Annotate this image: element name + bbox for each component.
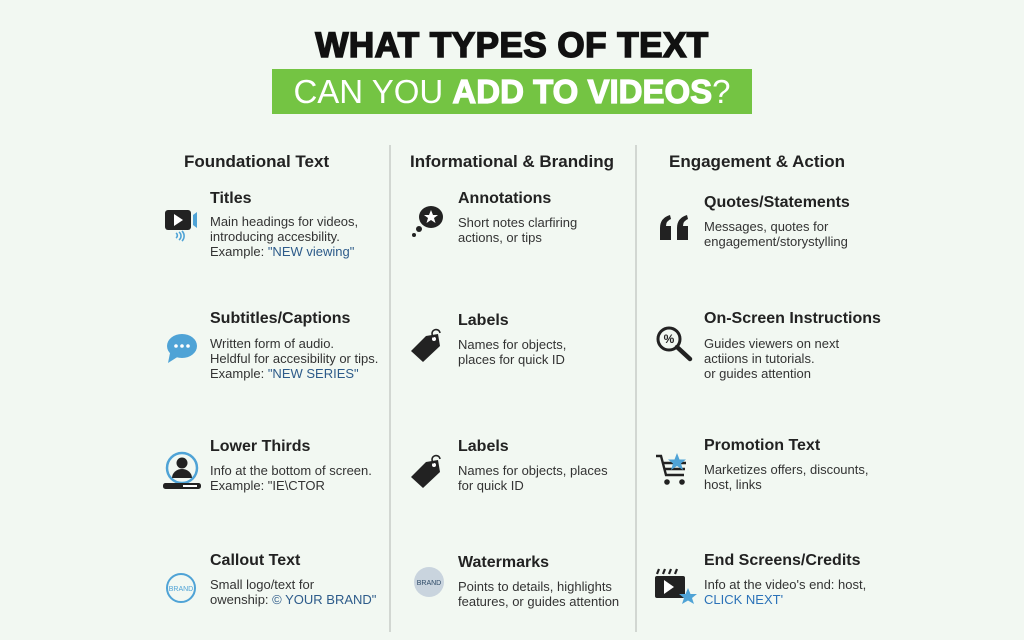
column heading: foundational: Foundational Text (184, 152, 329, 171)
item: Annotations (412, 190, 577, 245)
item: Lower thirds: Info at the bottom of screen. (210, 463, 372, 478)
item: On-screen: or guides attention (704, 366, 811, 381)
icon: cart star (656, 453, 686, 485)
item: Labels 1: Names for objects, (458, 337, 566, 352)
item: Subtitles: Written form of audio. (210, 336, 334, 351)
item: Labels 2: Labels (458, 438, 509, 455)
item: Callout: Small logo/text for (210, 577, 314, 592)
item: Watermarks: Watermarks (458, 554, 549, 571)
item: Labels 1: places for quick ID (458, 352, 565, 367)
item: Titles: Titles (210, 190, 252, 207)
item: Watermarks (414, 554, 619, 609)
item: Labels 1 (411, 312, 566, 367)
item: End screens (655, 552, 866, 607)
item: Promotion (656, 437, 868, 492)
item: Quotes: Quotes/Statements (704, 194, 850, 211)
item: Promotion: Promotion Text (704, 437, 820, 454)
item: Callout (166, 552, 376, 607)
item: Callout: owenship: © YOUR BRAND" (210, 592, 376, 607)
item: Promotion: Marketizes offers, discounts, (704, 462, 868, 477)
item: On-screen: actiions in tutorials. (704, 351, 815, 366)
icon: speech bubble (167, 334, 197, 363)
icon: magnifier percent: % (664, 332, 675, 346)
icon: clapper star (655, 568, 697, 604)
item: Annotations: Short notes clarfiring (458, 215, 577, 230)
item: Subtitles: Heldful for accesibility or tips. (210, 351, 378, 366)
title: WHAT TYPES OF TEXT (315, 26, 709, 65)
item: Labels 2: for quick ID (458, 478, 524, 493)
item: Titles: Main headings for videos, (210, 214, 358, 229)
item: Quotes: Messages, quotes for (704, 219, 828, 234)
item: On-screen: On-Screen Instructions (704, 310, 881, 327)
icon: magnifier percent (656, 326, 692, 362)
item: Labels 2 (411, 438, 608, 493)
icon: brand circle: BRAND (169, 586, 193, 593)
item: Watermarks: Points to details, highlights (458, 579, 612, 594)
column heading: engagement: Engagement & Action (669, 152, 845, 171)
item: Watermarks: features, or guides attention (458, 594, 619, 609)
icon: video play (165, 210, 197, 242)
item: Annotations: actions, or tips (458, 230, 542, 245)
item: Titles (165, 190, 358, 259)
item: Callout: Callout Text (210, 552, 300, 569)
item: Titles: introducing accesbility. (210, 229, 340, 244)
icon: quote (660, 215, 688, 240)
item: Subtitles: Subtitles/Captions (210, 310, 350, 327)
item: Lower thirds (163, 438, 372, 493)
item: Subtitles: Example: "NEW SERIES" (210, 366, 359, 381)
item: Annotations: Annotations (458, 190, 551, 207)
item: Subtitles (167, 310, 378, 381)
item: Lower thirds: Lower Thirds (210, 438, 310, 455)
item: Promotion: host, links (704, 477, 762, 492)
item: Labels 2: Names for objects, places (458, 463, 608, 478)
item: Lower thirds: Example: "IE\CTOR (210, 478, 325, 493)
icon: thought star (412, 206, 443, 237)
icon: person lower third (163, 452, 201, 489)
icon: brand watermark (414, 567, 444, 597)
icon: brand watermark: BRAND (417, 580, 441, 587)
item: End screens: Info at the video's end: host, (704, 577, 866, 592)
subtitle band: CAN YOU ADD TO VIDEOS? (293, 73, 731, 110)
item: End screens: End Screens/Credits (704, 552, 860, 569)
item: On-screen: Guides viewers on next (704, 336, 839, 351)
item: Labels 1: Labels (458, 312, 509, 329)
icon: tag (411, 454, 441, 488)
item: Quotes: engagement/storystylling (704, 234, 848, 249)
column heading: informational: Informational & Branding (410, 152, 614, 171)
icon: tag (411, 328, 441, 362)
icon: brand circle (166, 573, 196, 603)
item: Titles: Example: "NEW viewing" (210, 244, 354, 259)
item: On-screen (656, 310, 881, 381)
item: Quotes (660, 194, 850, 249)
item: End screens: CLICK NEXT' (704, 592, 783, 607)
